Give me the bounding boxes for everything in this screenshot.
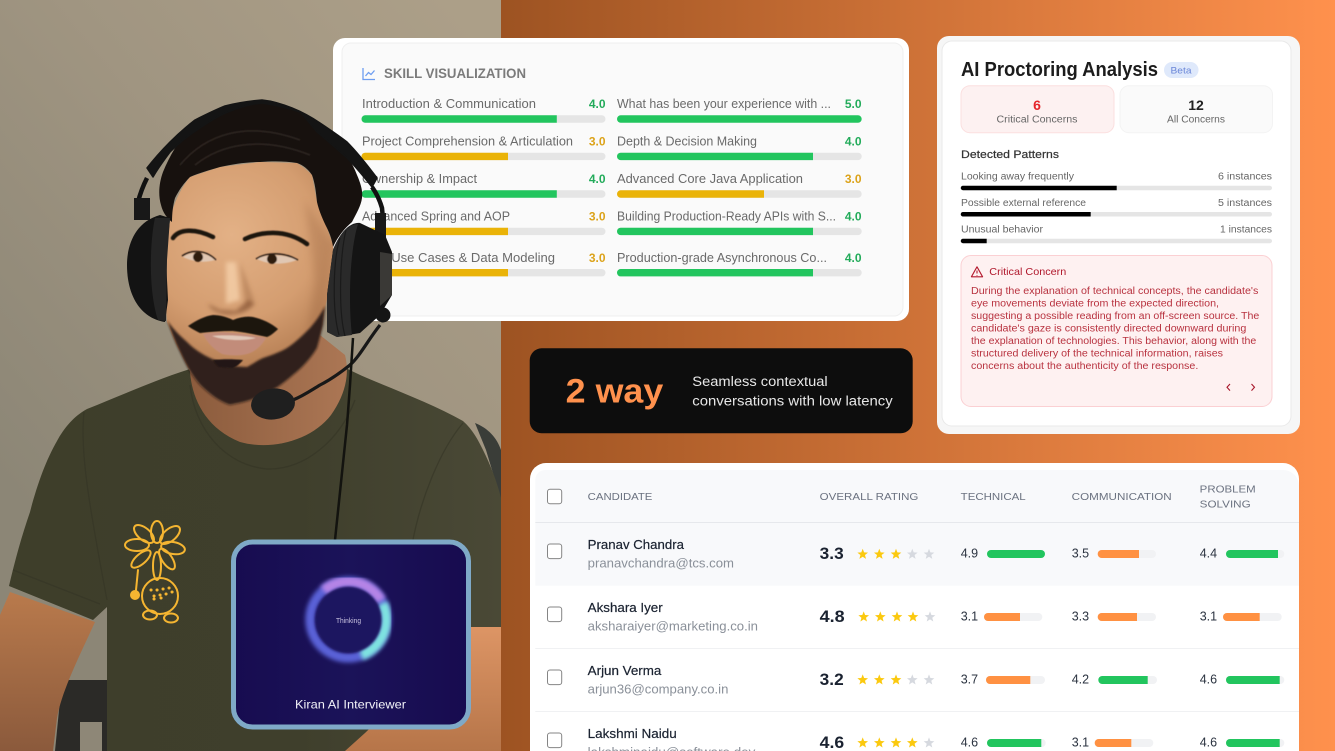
shirt logo: [125, 521, 186, 622]
pattern: external reference: Possible external reference: [961, 198, 1086, 209]
icon: line chart: [363, 68, 375, 80]
table header: OVERALL RATING: [820, 491, 918, 503]
callout body text: concerns about the authenticity of the response.: [971, 361, 1198, 372]
row: Arjun Verma: 4.2: [1072, 672, 1089, 686]
table header: COMMUNICATION: [1072, 491, 1172, 503]
skill rows right column: Depth & Decision Making: [617, 134, 757, 148]
row: Arjun Verma: Arjun Verma: [588, 663, 662, 678]
row: Pranav Chandra: 3.3: [820, 544, 844, 563]
left ear cup: [127, 215, 170, 322]
row: Arjun Verma: arjun36@company.co.in: [588, 682, 728, 696]
pattern: looking away: Looking away frequently: [961, 172, 1074, 183]
callout: critical concern: [961, 256, 1272, 406]
beard: [167, 306, 325, 405]
table header: CANDIDATE: [588, 491, 652, 503]
callout body text: [971, 286, 1260, 372]
callout body text: During the explanation of technical concepts, the candidate's: [971, 286, 1258, 297]
illustration: man wearing headset: [0, 100, 501, 751]
pattern: unusual behavior: 1 instances: [1220, 225, 1272, 236]
stat: all concerns: All Concerns: [1167, 114, 1225, 126]
row: Pranav Chandra: 3.5: [1072, 546, 1089, 560]
row: Pranav Chandra: [535, 523, 1299, 586]
table header: TECHNICAL: [961, 491, 1026, 503]
background: photo wall: [0, 0, 501, 751]
panel: Kiran AI interviewer: [234, 542, 468, 727]
description: conversations with low latency: [692, 394, 893, 409]
skill rows right column: 4.0: [845, 134, 862, 148]
row: Akshara Iyer: aksharaiyer@marketing.co.in: [588, 619, 758, 633]
skill rows left column: 4.0: [589, 172, 606, 186]
ring: thinking orb: [310, 582, 386, 658]
callout body text: suggesting a possible reading from an off-screen source. The: [971, 311, 1260, 322]
skill rows right column: Advanced Core Java Application: [617, 172, 803, 186]
background: orange gradient: [501, 0, 1335, 751]
microphone boom: [293, 325, 380, 400]
mouth: [188, 315, 278, 368]
heading: AI proctoring analysis: AI Proctoring Analysis: [961, 59, 1158, 81]
row: Lakshmi Naidu: 4.6: [961, 736, 978, 750]
left arm: [0, 592, 95, 751]
nose: [208, 262, 255, 314]
eyes and brows: [173, 231, 307, 264]
row: Lakshmi Naidu: [548, 726, 1284, 751]
t-shirt: [9, 357, 501, 751]
table header: [535, 470, 1299, 523]
pattern: external reference: [961, 198, 1272, 216]
row: Lakshmi Naidu: 3.1: [1072, 736, 1089, 750]
heading: skill visualization: SKILL VISUALIZATION: [384, 66, 526, 81]
right forearm: [338, 627, 501, 751]
row: Pranav Chandra: 4.9: [961, 546, 978, 560]
table header: SOLVING: [1200, 498, 1251, 510]
callout body text: eye movements deviate from the expected direction,: [971, 298, 1219, 310]
stat: critical concerns: Critical Concerns: [996, 114, 1078, 126]
row: Akshara Iyer: 3.1: [961, 610, 978, 624]
row: Pranav Chandra: pranavchandra@tcs.com: [588, 556, 734, 570]
row: Arjun Verma: 3.7: [961, 672, 978, 686]
skill rows left column: 3.0: [589, 210, 606, 224]
row: Akshara Iyer: 3.3: [1072, 610, 1089, 624]
band arms: [138, 178, 383, 238]
pattern: unusual behavior: Unusual behavior: [961, 225, 1044, 236]
heading: detected patterns: Detected Patterns: [961, 149, 1060, 161]
row: Arjun Verma: [535, 663, 1299, 712]
row: Akshara Iyer: Akshara Iyer: [588, 600, 663, 615]
callout body text: the explanation of technologies. This behavior, along with the: [971, 336, 1257, 347]
cable: [335, 338, 353, 540]
boom joint: [376, 308, 390, 322]
description: [692, 374, 893, 409]
callout title: Critical Concern: [989, 266, 1066, 278]
row: Akshara Iyer: 3.1: [1200, 610, 1217, 624]
face: [165, 162, 333, 405]
row: Akshara Iyer: [535, 600, 1299, 649]
badge: beta: [1164, 62, 1198, 78]
cheek shading: [305, 200, 333, 345]
skill rows right column: Building Production-Ready APIs with S...: [617, 210, 836, 224]
skill rows left column: [362, 97, 606, 276]
skill rows left column: Introduction & Communication: [362, 97, 536, 111]
skill rows left column: Advanced Spring and AOP: [362, 210, 510, 224]
table header: PROBLEM: [1200, 484, 1256, 496]
icon: previous next arrows: [1227, 384, 1254, 391]
row: Lakshmi Naidu: 4.6: [1200, 736, 1217, 750]
hair: [159, 101, 362, 247]
skill rows left column: 4.0: [589, 97, 606, 111]
skill rows left column: Ownership & Impact: [362, 172, 478, 186]
pattern: looking away: 6 instances: [1218, 172, 1272, 183]
stat: all concerns: [1120, 86, 1272, 133]
headband: [147, 100, 377, 187]
skill rows left column: SQL Use Cases & Data Modeling: [362, 251, 555, 265]
hair strands: [180, 131, 310, 165]
callout body text: structured delivery of the technical information, raises: [971, 348, 1223, 360]
big label: 2 way: 2 way: [566, 372, 663, 410]
panel: skill visualization: [333, 38, 909, 321]
microphone foam: [250, 386, 296, 422]
chair: [55, 423, 501, 751]
panel: AI proctoring analysis: [937, 36, 1300, 434]
skill rows left column: Project Comprehension & Articulation: [362, 134, 573, 148]
row: Akshara Iyer: 4.8: [820, 607, 845, 626]
callout body text: candidate's gaze is consistently directed downward during: [971, 324, 1246, 334]
shirt seams: [13, 385, 463, 604]
skill rows right column: 4.0: [845, 210, 862, 224]
row: Lakshmi Naidu: Lakshmi Naidu: [588, 726, 677, 741]
slider blocks: [134, 198, 386, 240]
neck: [190, 335, 347, 445]
caption: Kiran AI Interviewer: [295, 697, 406, 711]
icon: warning triangle: [971, 267, 983, 277]
pattern: external reference: 5 instances: [1218, 198, 1272, 209]
panel: candidate table: [530, 463, 1299, 751]
badge: beta: Beta: [1170, 66, 1192, 76]
skill rows left column: 3.0: [589, 251, 606, 265]
row: Pranav Chandra: Pranav Chandra: [588, 537, 685, 552]
row: Arjun Verma: 4.6: [1200, 672, 1217, 686]
right ear cup: [327, 223, 392, 337]
skill rows right column: 4.0: [845, 251, 862, 265]
skill rows right column: 3.0: [845, 172, 862, 186]
pattern: looking away: [961, 172, 1272, 190]
skill rows right column: 5.0: [845, 97, 862, 111]
description: Seamless contextual: [692, 374, 828, 389]
callout: 2 way: [530, 348, 913, 433]
orb label: Thinking: [336, 616, 361, 625]
row: Arjun Verma: 3.2: [820, 670, 844, 689]
stat: all concerns: 12: [1188, 97, 1204, 113]
stat: critical concerns: 6: [1033, 97, 1041, 113]
pattern: unusual behavior: [961, 225, 1272, 243]
row: Pranav Chandra: 4.4: [1200, 546, 1217, 560]
stat: critical concerns: [961, 86, 1114, 133]
skill rows right column: Production-grade Asynchronous Co...: [617, 251, 827, 265]
skill rows right column: What has been your experience with ...: [617, 97, 831, 111]
skill rows left column: 3.0: [589, 134, 606, 148]
skill rows right column: [617, 97, 862, 276]
